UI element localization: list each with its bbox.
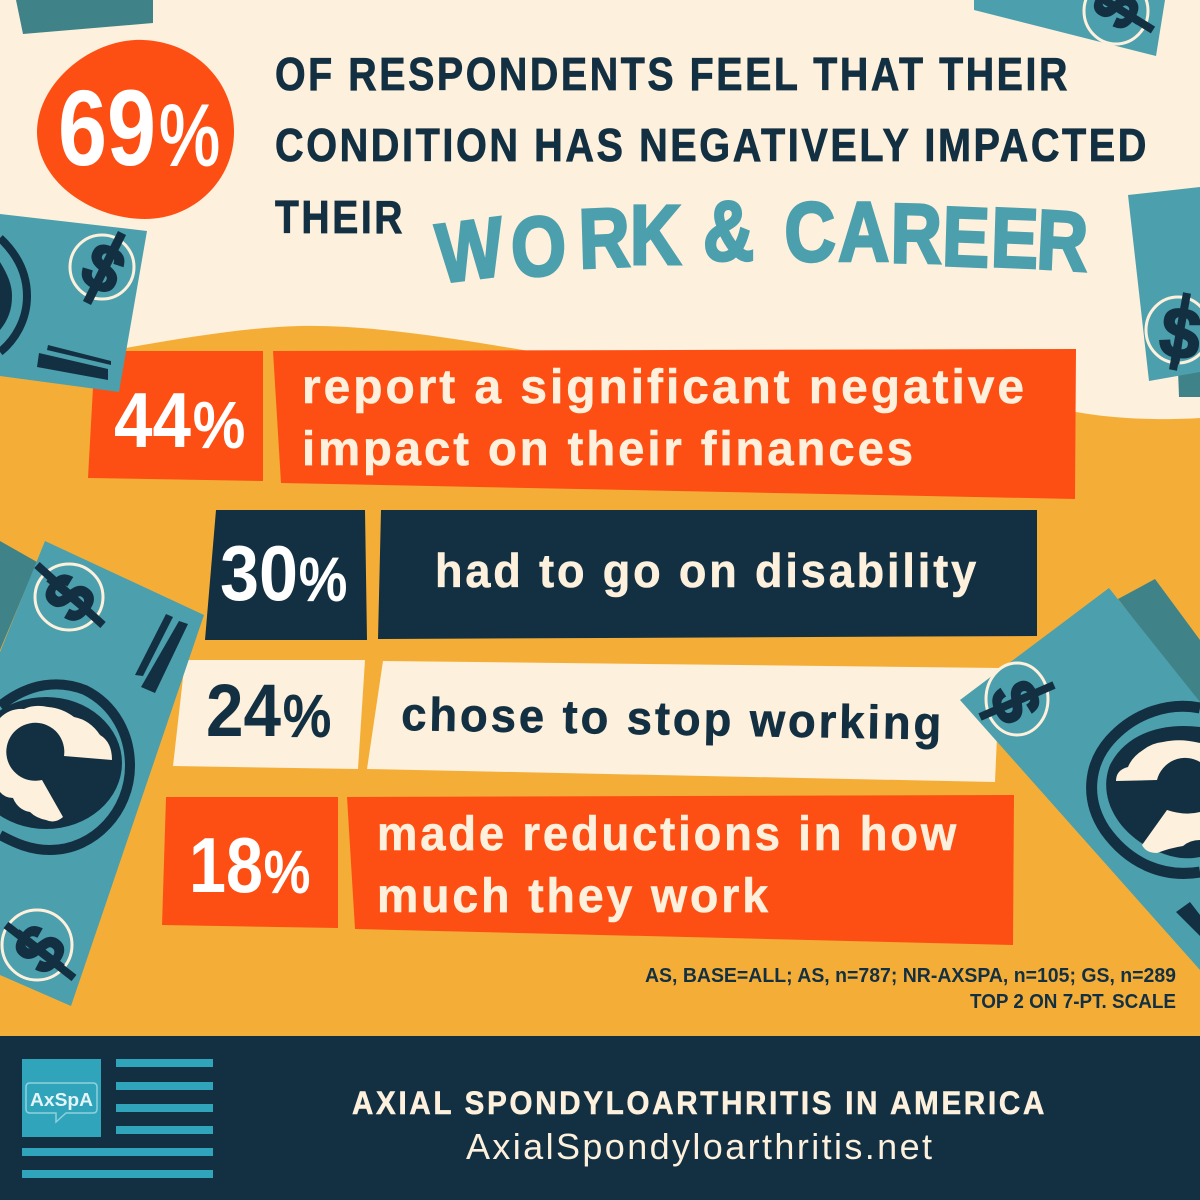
69% badge: 69 xyxy=(58,67,156,188)
right lower bill: $ xyxy=(975,670,1057,733)
bar: 24%: % xyxy=(283,684,331,749)
bar: 30%: 30 xyxy=(220,529,298,617)
source note xyxy=(645,965,1176,1013)
logo flag: AxSpA xyxy=(30,1090,93,1110)
title text xyxy=(275,48,1149,243)
bar: 18%: 18 xyxy=(189,821,263,909)
source note: TOP 2 ON 7-PT. SCALE xyxy=(970,991,1176,1013)
bar: 30% xyxy=(205,510,1037,640)
bar: 44%: report a significant negative xyxy=(302,361,1027,414)
bar: 44%: impact on their finances xyxy=(302,423,916,476)
bar: 18% xyxy=(162,795,1014,945)
footer band xyxy=(0,1036,1200,1200)
bar: 18%: % xyxy=(264,840,310,905)
right upper bill xyxy=(1128,187,1200,397)
left lower bill: $ xyxy=(28,559,111,637)
bar: 18%: made reductions in how xyxy=(377,808,959,861)
bar: 30%: had to go on disability xyxy=(435,544,979,597)
footer url: AxialSpondyloarthritis.net xyxy=(466,1126,932,1167)
bar: 18%: much they work xyxy=(377,870,771,923)
top-right bill xyxy=(974,0,1165,56)
heading: work and career: WORK&CAREER xyxy=(433,185,1090,301)
69% badge: % xyxy=(159,88,220,184)
69% badge xyxy=(37,40,234,219)
bar: 24% xyxy=(173,660,1000,782)
bar: 24%: 24 xyxy=(206,669,281,752)
right lower bill xyxy=(960,579,1200,970)
title text: THEIR xyxy=(275,191,405,243)
bar: 30%: % xyxy=(299,546,347,613)
footer title: AXIAL SPONDYLOARTHRITIS IN AMERICA xyxy=(352,1085,1047,1121)
left upper bill: $ xyxy=(70,227,137,309)
bar: 24%: chose to stop working xyxy=(401,687,945,749)
logo flag xyxy=(22,1059,213,1178)
top-left dark bill corner xyxy=(16,0,153,34)
left lower bill xyxy=(0,541,204,1006)
bar: 44%: % xyxy=(193,389,245,461)
left upper bill xyxy=(0,214,147,392)
bar: 44%: 44 xyxy=(114,376,191,464)
source note: AS, BASE=ALL; AS, n=787; NR-AXSPA, n=105; GS, n=289 xyxy=(645,965,1176,987)
left lower bill: $ xyxy=(0,911,82,987)
title text: OF RESPONDENTS FEEL THAT THEIR xyxy=(275,48,1070,100)
bar: 44% xyxy=(88,349,1076,499)
